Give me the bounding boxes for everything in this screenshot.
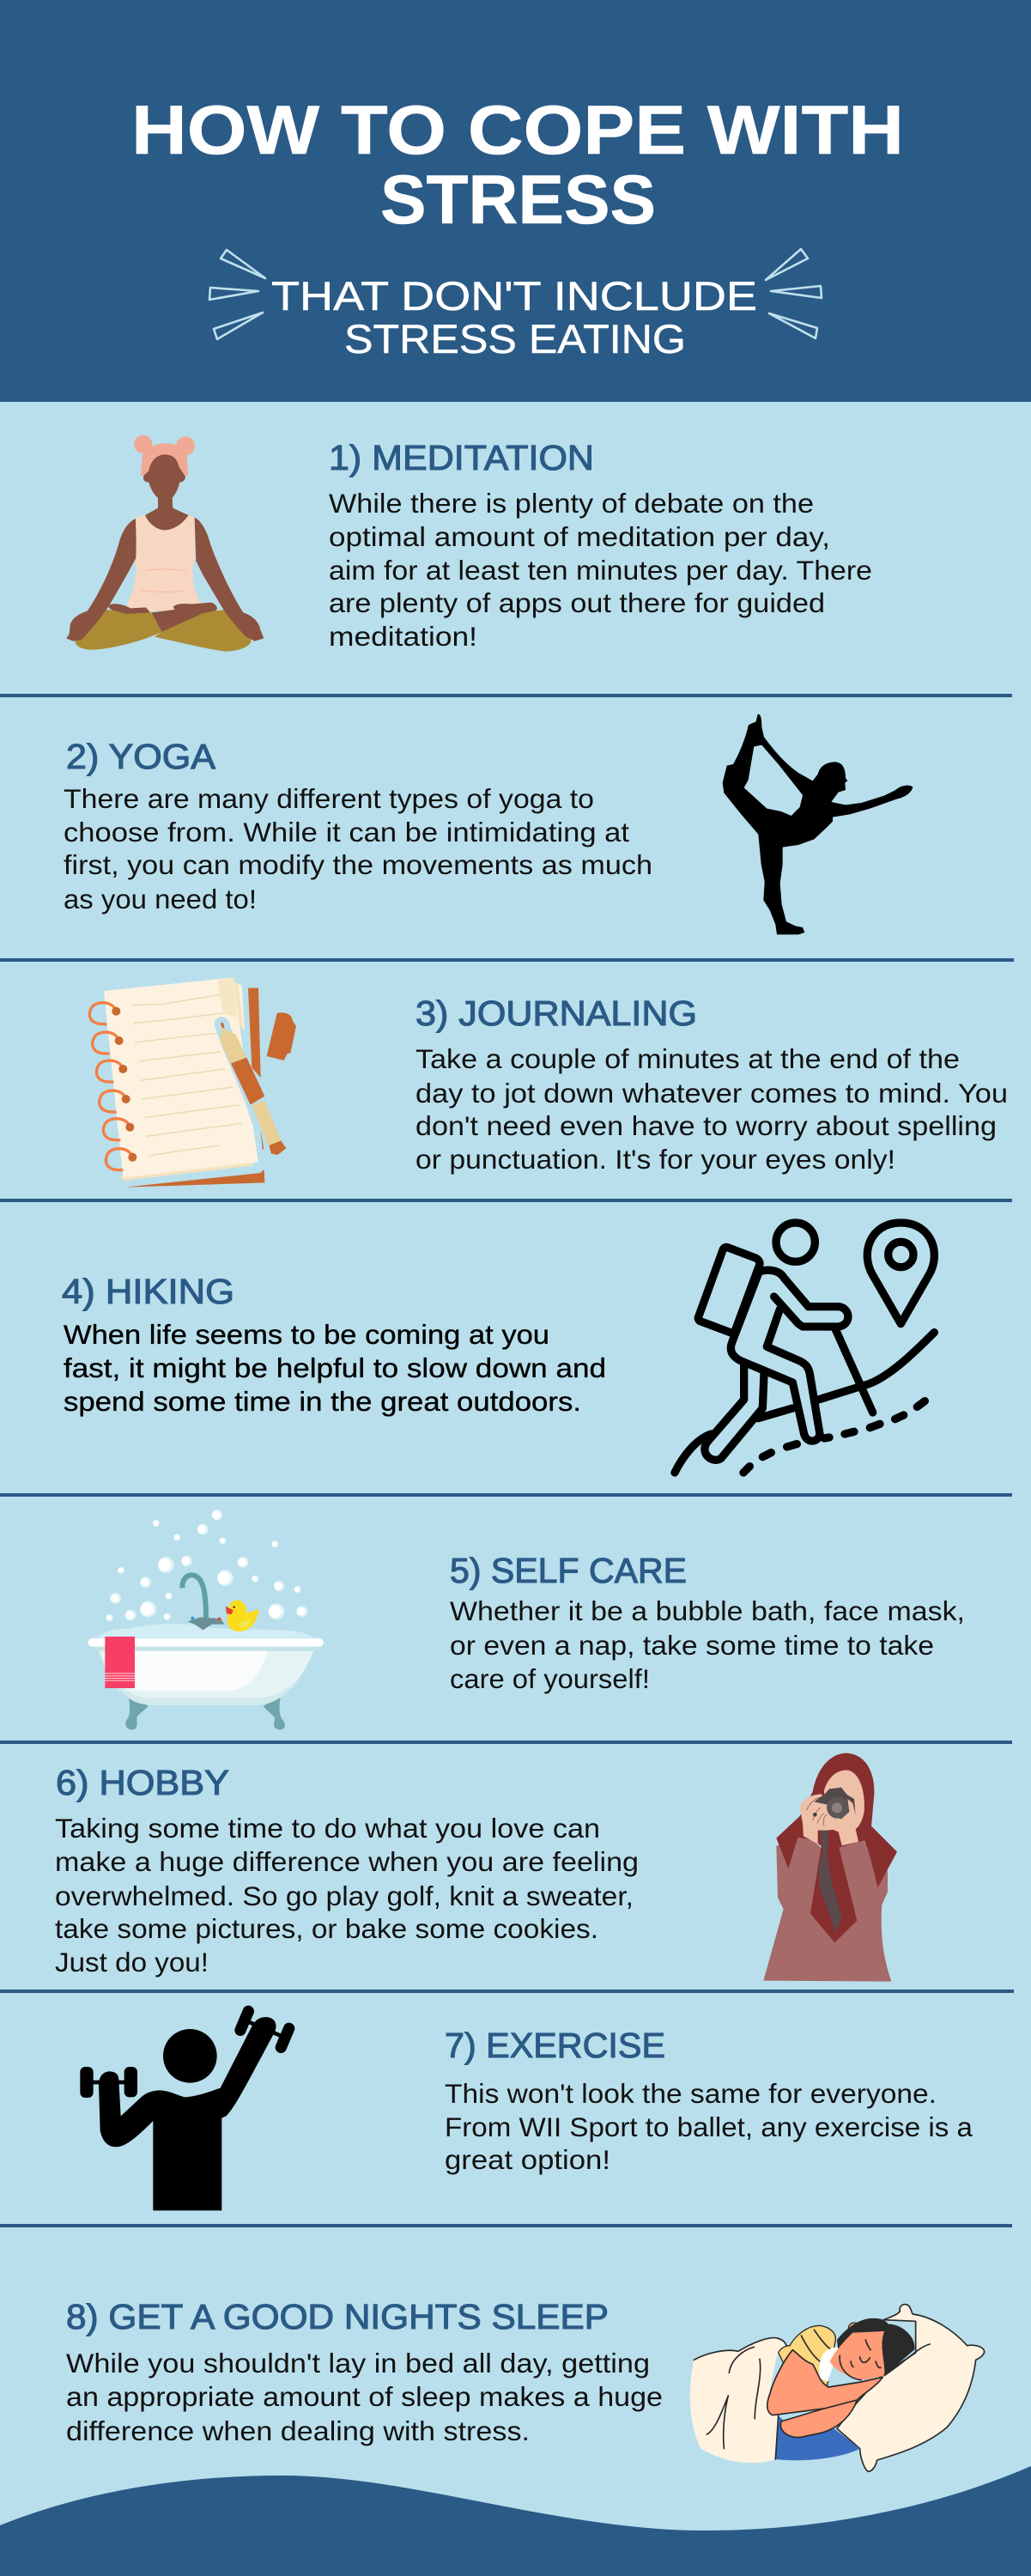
text: hobby body: overwhelmed. So go play golf, knit a sweater,: [55, 1880, 634, 1911]
icon: hiker with map pin: [675, 1223, 934, 1473]
heading: 3) journaling: 3) JOURNALING: [415, 993, 697, 1033]
spiral rings: [89, 1003, 132, 1170]
heading: 8) get a good nights sleep: 8) GET A GOOD NIGHTS SLEEP: [66, 2297, 609, 2336]
text: meditation body: are plenty of apps out there for guided: [329, 587, 825, 618]
text: hiking body: [64, 1319, 606, 1417]
text: exercise body: From WII Sport to ballet, any exercise is a: [445, 2111, 973, 2142]
panel: exercise: [80, 2011, 973, 2210]
text: hobby body: make a huge difference when you are feeling: [55, 1846, 639, 1877]
heading: 5) self care: 5) SELF CARE: [450, 1551, 687, 1590]
text: yoga body: [64, 783, 652, 914]
subtitle: THAT DON'T INCLUDE: [271, 273, 757, 319]
text: hiking body: fast, it might be helpful to slow down and: [64, 1352, 606, 1383]
text: self care body: [450, 1595, 965, 1694]
text: exercise body: great option!: [445, 2144, 610, 2175]
heading: 6) hobby: 6) HOBBY: [56, 1763, 229, 1802]
panel: sleep: [66, 2297, 985, 2471]
icon: person sleeping on pillow: [690, 2305, 985, 2471]
heading: 2) yoga: 2) YOGA: [66, 737, 216, 776]
header banner: [0, 0, 1031, 402]
text: hobby body: take some pictures, or bake some cookies.: [55, 1913, 598, 1944]
heading: 4) hiking: 4) HIKING: [62, 1272, 234, 1311]
text: hobby body: Just do you!: [55, 1947, 209, 1978]
bubbles: [106, 1510, 307, 1621]
text: journaling body: day to jot down whatever comes to mind. You: [415, 1078, 1008, 1109]
icon: right sparkle burst: [766, 249, 822, 338]
text: meditation body: aim for at least ten minutes per day. There: [329, 555, 872, 586]
text: journaling body: Take a couple of minutes at the end of the: [415, 1043, 960, 1074]
subtitle: STRESS EATING: [344, 316, 686, 361]
text: hiking body: When life seems to be coming at you: [64, 1319, 549, 1350]
panel: hiking: [62, 1223, 934, 1473]
text: sleep body: While you shouldn't lay in bed all day, getting: [66, 2348, 650, 2379]
text: yoga body: There are many different types of yoga to: [64, 783, 594, 814]
panel: journaling: [89, 977, 1008, 1188]
pen: [221, 1024, 260, 1125]
footer wave: [0, 2466, 1031, 2576]
text: yoga body: choose from. While it can be intimidating at: [64, 817, 629, 848]
title: STRESS: [380, 161, 656, 239]
panel: hobby: [55, 1753, 897, 1982]
icon: woman with camera: [763, 1753, 897, 1982]
icon: notebook and pen: [89, 977, 296, 1188]
text: hobby body: [55, 1813, 639, 1978]
panel: yoga: [64, 714, 913, 934]
heading: 7) exercise: 7) EXERCISE: [445, 2026, 665, 2065]
text: sleep body: difference when dealing with stress.: [66, 2415, 530, 2446]
title: [131, 92, 904, 239]
text: journaling body: or punctuation. It's for your eyes only!: [415, 1144, 895, 1175]
text: sleep body: [66, 2348, 663, 2446]
panel: self care: [88, 1510, 965, 1730]
written lines: [131, 994, 242, 1156]
heading: 1) meditation: 1) MEDITATION: [329, 438, 594, 477]
icon: yoga silhouette: [723, 714, 913, 934]
icon: left sparkle burst: [209, 250, 265, 339]
text: yoga body: first, you can modify the movements as much: [64, 849, 652, 880]
icon: bubble bath: [88, 1510, 324, 1730]
text: sleep body: an appropriate amount of sleep makes a huge: [66, 2381, 663, 2412]
text: yoga body: as you need to!: [64, 884, 257, 914]
text: hobby body: Taking some time to do what you love can: [55, 1813, 600, 1844]
text: hiking body: spend some time in the great outdoors.: [64, 1386, 581, 1417]
text: self care body: care of yourself!: [450, 1663, 650, 1694]
panel: meditation: [66, 435, 872, 652]
text: meditation body: [329, 488, 872, 652]
text: meditation body: meditation!: [329, 621, 477, 652]
icon: meditating woman: [66, 435, 264, 651]
title: HOW TO COPE WITH: [131, 92, 904, 169]
icon: figure lifting dumbbells: [80, 2011, 289, 2210]
text: journaling body: [415, 1043, 1008, 1175]
subtitle: [271, 273, 757, 361]
text: self care body: or even a nap, take some time to take: [450, 1630, 934, 1661]
text: exercise body: [445, 2078, 973, 2175]
text: meditation body: optimal amount of meditation per day,: [329, 521, 830, 552]
text: meditation body: While there is plenty of debate on the: [329, 488, 814, 519]
text: self care body: Whether it be a bubble bath, face mask,: [450, 1595, 965, 1626]
text: journaling body: don't need even have to worry about spelling: [415, 1110, 997, 1141]
text: exercise body: This won't look the same for everyone.: [445, 2078, 937, 2109]
